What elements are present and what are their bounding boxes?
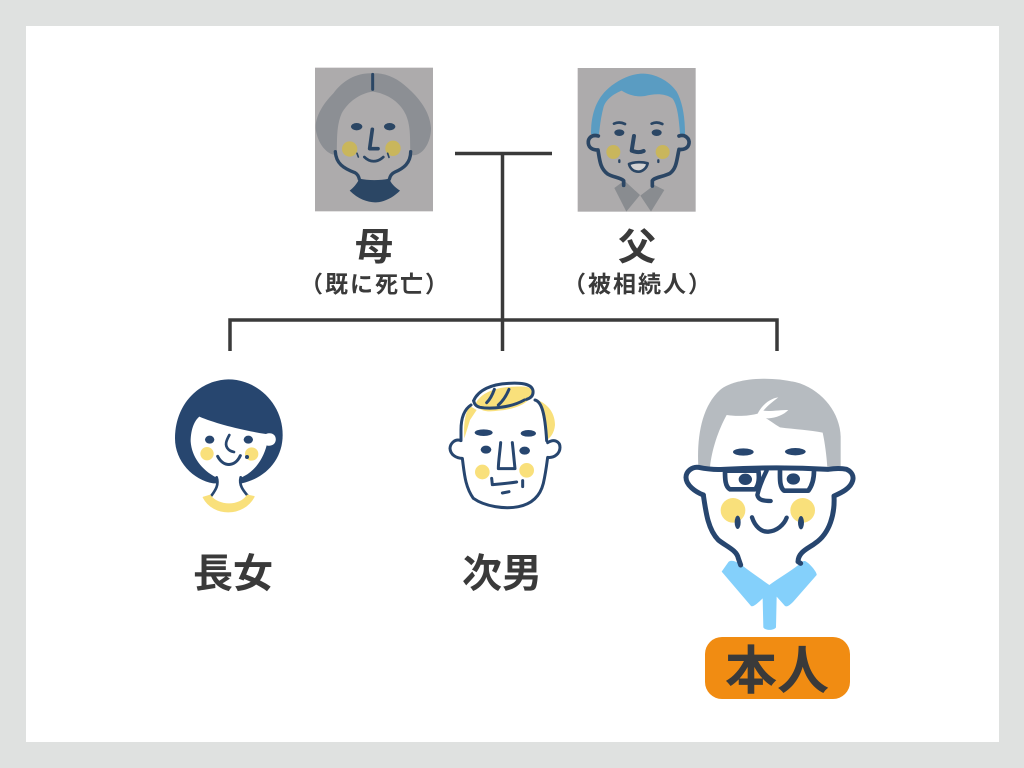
label badge: self (705, 637, 850, 701)
heading: father label: （被相続人） (563, 271, 713, 297)
heading: mother label (300, 227, 450, 297)
connector lines (230, 153, 777, 351)
icon: father portrait (578, 68, 696, 212)
icon: eldest daughter face (175, 379, 283, 512)
heading: mother label: 母 (355, 227, 393, 269)
heading: father label (563, 227, 713, 297)
icon: second son face (450, 383, 560, 508)
label: second son: 次男 (462, 552, 542, 596)
icon: self face (686, 379, 853, 630)
label badge: self: 本人 (725, 643, 829, 701)
icon: mother portrait (315, 68, 433, 211)
label: eldest daughter: 長女 (193, 552, 273, 596)
heading: father label: 父 (618, 227, 656, 269)
heading: mother label: （既に死亡） (300, 271, 450, 297)
